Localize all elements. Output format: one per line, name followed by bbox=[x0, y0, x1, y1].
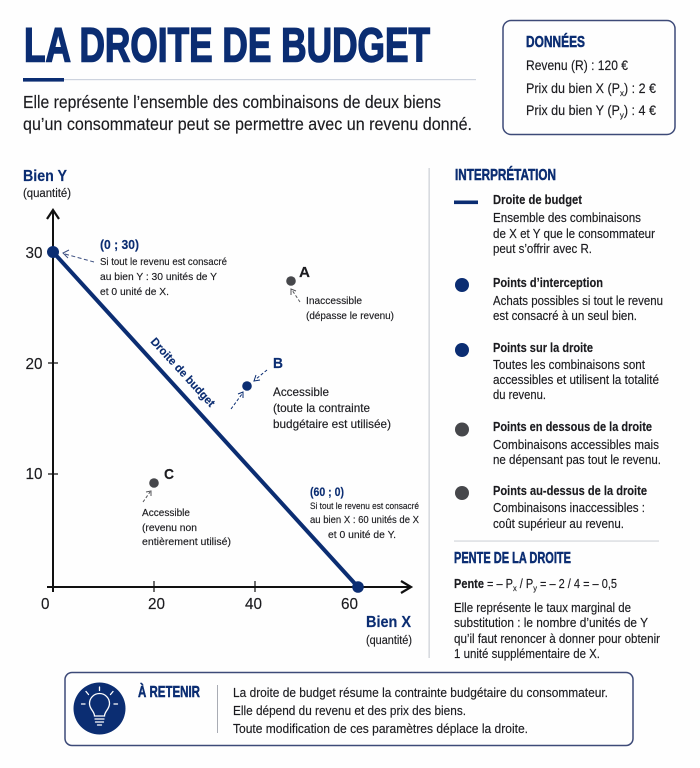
prix du bien X: x bbox=[620, 88, 625, 98]
callout: (60 ; 0): Si tout le revenu est consacré bbox=[310, 501, 419, 512]
takeaway text: Elle dépend du revenu et des prix des biens. bbox=[233, 703, 466, 718]
x axis title bbox=[366, 614, 412, 647]
takeaway text bbox=[233, 685, 608, 736]
legend: points au-dessus: Combinaisons inaccessibles : bbox=[493, 501, 645, 515]
explanation: qu’il faut renoncer à donner pour obtenir bbox=[454, 632, 660, 646]
explanation bbox=[454, 601, 660, 661]
legend: points en dessous bbox=[455, 420, 661, 467]
legend: points sur la droite: Points sur la droite bbox=[493, 341, 593, 355]
y axis title: Bien Y bbox=[23, 168, 68, 185]
y axis title bbox=[23, 168, 71, 200]
heading: données: DONNÉES bbox=[526, 34, 585, 51]
legend: points d'interception: Points d’interception bbox=[493, 276, 603, 290]
callout: (60 ; 0) bbox=[310, 487, 419, 541]
heading: à retenir: À RETENIR bbox=[138, 684, 200, 701]
y axis labels: 30 bbox=[26, 245, 43, 262]
column divider bbox=[428, 168, 430, 658]
legend: points d'interception bbox=[455, 276, 663, 323]
point B: budgétaire est utilisée) bbox=[273, 417, 391, 431]
revenu: Revenu (R) : 120 € bbox=[526, 58, 628, 73]
y axis labels: 10 bbox=[26, 466, 43, 483]
y axis labels: 20 bbox=[26, 356, 43, 373]
callout: (0 ; 30) bbox=[100, 238, 227, 298]
x axis labels bbox=[41, 596, 358, 613]
section divider bbox=[454, 540, 659, 542]
subtitle bbox=[23, 92, 472, 134]
title underline bbox=[23, 78, 476, 82]
point C: C bbox=[164, 466, 174, 483]
subtitle: qu’un consommateur peut se permettre avec un revenu donné. bbox=[23, 114, 472, 134]
x axis labels: 40 bbox=[245, 596, 262, 613]
legend: droite de budget: Ensemble des combinaisons bbox=[493, 211, 641, 225]
legend: points au-dessus: coût supérieur au revenu. bbox=[493, 517, 624, 531]
legend: droite de budget: peut s’offrir avec R. bbox=[493, 242, 592, 256]
formula: / P bbox=[517, 577, 533, 591]
legend: points sur la droite bbox=[455, 341, 659, 402]
point B: Accessible bbox=[273, 385, 329, 399]
panel: interprétation bbox=[454, 167, 663, 531]
point C: Accessible bbox=[142, 507, 190, 519]
y axis labels bbox=[26, 245, 43, 483]
point B bbox=[231, 355, 391, 431]
explanation: 1 unité supplémentaire de X. bbox=[454, 647, 600, 661]
legend: droite de budget: Droite de budget bbox=[493, 193, 583, 207]
divider bbox=[217, 685, 218, 733]
callout: (0 ; 30): et 0 unité de X. bbox=[100, 286, 169, 298]
takeaway text: La droite de budget résume la contrainte budgétaire du consommateur. bbox=[233, 685, 608, 700]
point B: B bbox=[273, 355, 283, 372]
legend: points en dessous: Combinaisons accessibles mais bbox=[493, 438, 659, 452]
title: LA DROITE DE BUDGET bbox=[24, 20, 430, 72]
chart: droite de budget bbox=[23, 168, 419, 647]
takeaway text: Toute modification de ces paramètres déplace la droite. bbox=[233, 721, 528, 736]
legend: points au-dessus bbox=[455, 484, 647, 531]
axes bbox=[47, 210, 411, 593]
legend: points en dessous: Points en dessous de la droite bbox=[493, 420, 652, 434]
explanation: substitution : le nombre d’unités de Y bbox=[454, 616, 649, 630]
legend: points sur la droite: accessibles et utilisent la totalité bbox=[493, 373, 659, 387]
callout: (0 ; 30): au bien Y : 30 unités de Y bbox=[100, 271, 217, 283]
heading: pente: PENTE DE LA DROITE bbox=[454, 550, 571, 567]
point A bbox=[286, 264, 394, 322]
panel: à retenir bbox=[65, 672, 633, 746]
callout: (60 ; 0): (60 ; 0) bbox=[310, 487, 344, 499]
icon: light bulb bbox=[74, 682, 126, 734]
point A: A bbox=[299, 264, 310, 281]
x axis labels: 60 bbox=[341, 596, 358, 613]
formula: = – 2 / 4 = – 0,5 bbox=[537, 577, 617, 591]
y axis title: (quantité) bbox=[23, 188, 71, 200]
arrow: to intercept Y bbox=[63, 250, 94, 262]
prix du bien X: ) : 2 € bbox=[624, 81, 656, 96]
panel: pente de la droite bbox=[454, 550, 660, 661]
callout: (60 ; 0): et 0 unité de Y. bbox=[328, 529, 396, 541]
legend: points sur la droite: Toutes les combinaisons sont bbox=[493, 358, 645, 372]
prix du bien Y: ) : 4 € bbox=[624, 103, 656, 118]
heading: interprétation: INTERPRÉTATION bbox=[455, 167, 556, 184]
point B: (toute la contrainte bbox=[273, 401, 370, 415]
point C bbox=[142, 466, 231, 548]
legend: points d'interception: est consacré à un seul bien. bbox=[493, 309, 637, 323]
explanation: Elle représente le taux marginal de bbox=[454, 601, 631, 615]
budget line bbox=[53, 252, 358, 587]
intercept point X bbox=[352, 581, 364, 593]
point C: entièrement utilisé) bbox=[142, 536, 231, 548]
x axis title: Bien X bbox=[366, 614, 412, 631]
legend: droite de budget: de X et Y que le consommateur bbox=[493, 227, 655, 241]
legend: points sur la droite: du revenu. bbox=[493, 388, 546, 402]
point A: (dépasse le revenu) bbox=[306, 310, 394, 322]
formula: x bbox=[513, 583, 517, 593]
intercept point Y bbox=[47, 246, 59, 258]
legend: points au-dessus: Points au-dessus de la droite bbox=[493, 484, 647, 498]
point A: Inaccessible bbox=[306, 295, 362, 307]
panel: données bbox=[503, 20, 675, 134]
line label: Droite de budget bbox=[148, 336, 217, 410]
x axis labels: 20 bbox=[148, 596, 165, 613]
callout: (60 ; 0): au bien X : 60 unités de X bbox=[310, 514, 419, 526]
x axis title: (quantité) bbox=[366, 635, 412, 647]
subtitle: Elle représente l’ensemble des combinaisons de deux biens bbox=[23, 92, 441, 112]
prix du bien X: Prix du bien X (P bbox=[526, 81, 627, 96]
callout: (0 ; 30): (0 ; 30) bbox=[100, 238, 139, 252]
x axis labels: 0 bbox=[41, 596, 50, 613]
point C: (revenu non bbox=[142, 522, 197, 534]
prix du bien Y: y bbox=[620, 110, 625, 120]
prix du bien Y: Prix du bien Y (P bbox=[526, 103, 627, 118]
formula: Pente = – P bbox=[454, 577, 517, 591]
legend: points d'interception: Achats possibles si tout le revenu bbox=[493, 294, 663, 308]
formula: y bbox=[533, 583, 538, 593]
legend: droite de budget bbox=[454, 193, 655, 256]
callout: (0 ; 30): Si tout le revenu est consacré bbox=[100, 256, 227, 268]
legend: points en dessous: ne dépensant pas tout le revenu. bbox=[493, 453, 661, 467]
